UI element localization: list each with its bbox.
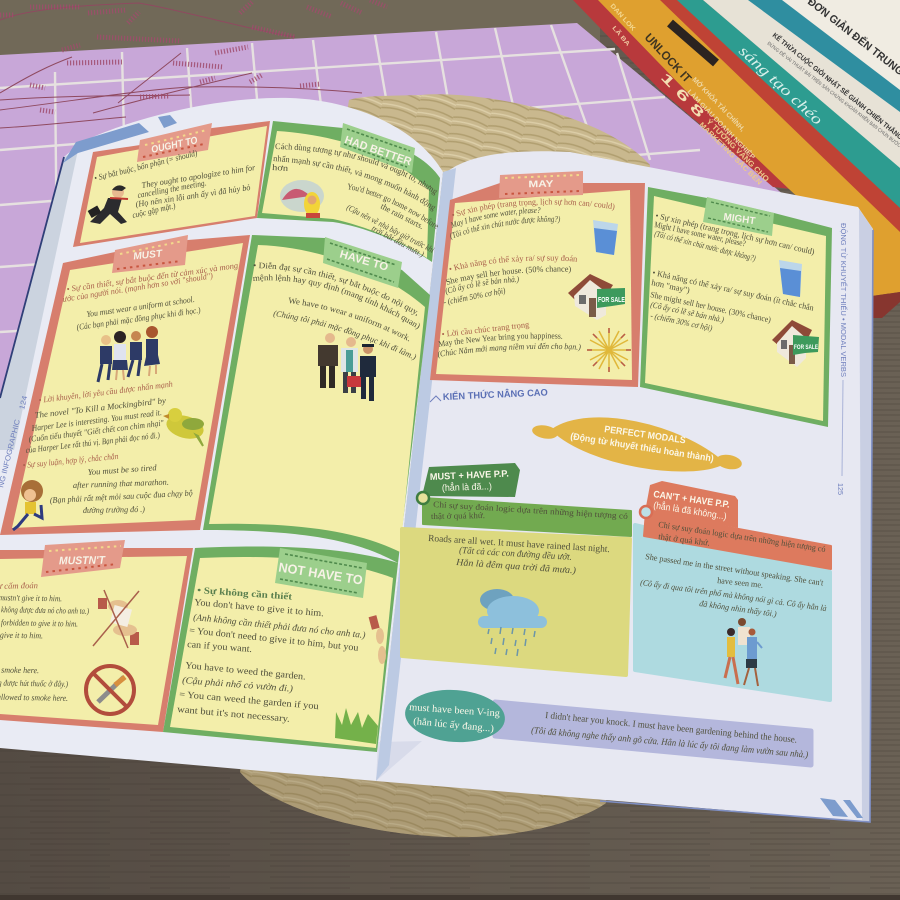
text: must: • Lời khuyên, lời yêu cầu được nhấn mạnh <box>38 379 173 405</box>
text: ought to: cuộc gặp mặt.) <box>131 200 176 220</box>
icon: glass of water <box>779 260 802 297</box>
text: must: • Sự suy luận, hợp lý, chắc chắn <box>22 451 119 470</box>
text: may <box>438 198 614 358</box>
side label: left page running title and page number <box>0 395 29 488</box>
heading: ought to <box>137 123 212 162</box>
example sentence: I didn't hear you knock. I must have been gardening behind the house. <box>545 711 797 746</box>
text: must: Harper Lee is interesting. You must read it. <box>30 407 162 433</box>
tab: must + have p.p.: (hẳn là đã...) <box>442 480 492 494</box>
text: can't + have p.p.: (Cô ấy đi qua tôi trên phố mà không nói gì cả. Cô ấy hẳn là <box>640 577 827 613</box>
heading: mustn't: MUSTN'T <box>59 555 106 567</box>
icon: yellow mockingbird <box>163 408 206 446</box>
text: can't + have p.p.: đã không nhìn thấy tôi.) <box>699 598 778 619</box>
heading: ought to: OUGHT TO <box>150 135 199 156</box>
text: ought to: • Sự bắt buộc, bổn phận (= should) <box>93 148 198 183</box>
ring marker <box>417 492 429 504</box>
heading: had better <box>340 123 415 173</box>
side label: right page chapter title and page number: ĐỘNG TỪ KHUYẾT THIẾU • MODAL VERBS <box>839 223 849 377</box>
text: might <box>650 210 816 333</box>
text: must: ước của người nói. (mạnh hơn so với "should") <box>62 270 214 304</box>
icon: running businessman <box>88 185 128 224</box>
heading: may <box>499 171 583 198</box>
text: not have to: want but it's not necessary. <box>177 705 290 725</box>
text: might: hơn "may") <box>651 277 691 295</box>
book titles: UNLOCK IT <box>642 30 695 86</box>
text: might: Might I have some water, please? <box>654 219 747 248</box>
text: may: • Lời cầu chúc trang trọng <box>441 319 530 339</box>
tab: can't + have p.p.: (hẳn là đã không...) <box>653 499 727 523</box>
icon: house for sale <box>568 274 625 320</box>
text: had better: You'd better go home now before <box>348 184 438 229</box>
text: must: (Cuốn tiểu thuyết "Giết chết con chim nhại" <box>28 417 165 444</box>
icon: house for sale: FOR SALE <box>598 297 625 304</box>
icon: firefighter, doctor and police officer <box>318 333 376 401</box>
icon: house for sale: FOR SALE <box>794 344 818 351</box>
text: can't + have p.p.: thật ở quá khứ. <box>658 531 711 548</box>
text: ought to: (Họ nên xin lỗi anh ấy vì đã hủy bỏ <box>135 182 251 209</box>
text: might: • Khả năng có thể xảy ra/ sự suy đoán (ít chắc chắn <box>652 267 816 313</box>
text: may: May the New Year bring you happiness. <box>438 332 562 348</box>
text: must: You must wear a uniform at school. <box>86 294 195 319</box>
text: must <box>22 260 239 515</box>
text: may: (Tôi có thể xin chút nước được không?) <box>450 216 560 240</box>
text: might: She might sell her house. (30% chance) <box>650 289 772 325</box>
heading: had better: HAD BETTER <box>343 134 413 168</box>
text: had better: (Cậu nên về nhà bây giờ trước khi <box>345 202 437 255</box>
text: must + have p.p. <box>428 499 628 576</box>
side label: right page chapter title and page number: 125 <box>836 483 845 495</box>
text: must + have p.p.: Chỉ sự suy đoán logic dựa trên những hiện tượng có <box>433 499 628 521</box>
heading: have to: HAVE TO <box>338 248 390 274</box>
text: had better <box>272 143 438 259</box>
icon: no smoking sign <box>86 666 134 714</box>
panel: must <box>0 235 250 535</box>
text: might: (Cô ấy có lẽ sẽ bán nhà.) <box>650 299 725 325</box>
heading: might <box>703 197 774 236</box>
heading: must <box>112 235 188 273</box>
text: had better: nhấn mạnh sự cần thiết, và mong muốn hành động <box>273 155 436 212</box>
text: must: (Các bạn phải mặc đồng phục khi đi học.) <box>76 305 201 332</box>
text: not have to: You have to weed the garden. <box>185 661 306 683</box>
book titles: MARKETING SẮC BÉN <box>698 120 764 187</box>
icon: girl with umbrella in the rain <box>280 180 324 218</box>
text: must: (Bạn phải rất mệt mỏi sau cuộc đua chạy bộ <box>50 488 193 505</box>
text: not have to: = You don't need to give it to him, but you <box>189 626 359 654</box>
panel: mustn't <box>0 540 193 732</box>
book titles: sáng tạo chéo <box>735 43 826 129</box>
text: must: đường trường đó .) <box>83 504 145 515</box>
panel: ought to <box>73 121 270 247</box>
heading: might: MIGHT <box>723 212 756 227</box>
heading: have to <box>323 237 402 288</box>
badge: must have been v-ing: (hẳn lúc ấy đang...) <box>413 716 494 735</box>
book titles <box>609 0 900 187</box>
text: not have to: (Anh không cần thiết phải đưa nó cho anh ta.) <box>193 612 366 641</box>
text: not have to: • Sự không cần thiết <box>197 585 293 603</box>
text: can't + have p.p.: have seen me. <box>717 575 764 590</box>
text: had better: hơn <box>272 162 289 173</box>
icon: hands passing a note <box>369 615 386 664</box>
gutter shadow <box>376 168 456 781</box>
text: not have to: (Cậu phải nhổ cỏ vườn đi.) <box>182 675 293 695</box>
side label: left page running title and page number: 124 <box>17 395 29 410</box>
book titles: MỞ KHÓA TÀI CHÍNH, <box>691 75 747 133</box>
icon: grass <box>335 708 378 744</box>
text: have to <box>253 262 420 360</box>
banner: perfect modals: (Động từ khuyết thiếu hoàn thành) <box>570 431 714 465</box>
text: not have to <box>177 585 366 725</box>
text: ought to: They ought to apologize to him for <box>141 162 257 190</box>
text: had better: Cách dùng tương tự như should và ought to, nhưng <box>275 143 438 196</box>
right page <box>376 151 873 822</box>
badge: must have been v-ing: must have been V-ing <box>409 702 500 719</box>
text: can't + have p.p.: Chỉ sự suy đoán logic dựa trên những hiện tượng có <box>658 519 826 554</box>
left page <box>0 98 443 781</box>
book stack <box>573 0 900 318</box>
text: have to: • Diễn đạt sự cần thiết, sự bắt buộc do nội quy, <box>254 262 418 316</box>
example sentence <box>531 711 809 761</box>
text: may: • Sự xin phép (trang trọng, lịch sự hơn can/ could) <box>452 198 614 216</box>
callout: must have been v-ing <box>403 687 811 765</box>
cover and page block edges <box>0 115 873 822</box>
icon: fireworks <box>587 328 631 372</box>
icon: three friends walking <box>725 618 762 686</box>
text: must: You must be so tired <box>87 462 158 477</box>
heading: may: MAY <box>528 179 554 190</box>
icon: students in uniform <box>98 326 160 382</box>
icon: house for sale <box>772 320 819 367</box>
side label: right page chapter title and page number <box>836 223 849 495</box>
banner: perfect modals: PERFECT MODALS <box>604 424 686 446</box>
panel: have to <box>203 235 430 563</box>
text: ought to <box>93 148 257 220</box>
icon: rain cloud <box>478 589 547 656</box>
dried flower branches <box>0 0 387 128</box>
tab: can't + have p.p. <box>645 481 738 528</box>
text: may: (Chúc Năm mới mang niềm vui đến cho bạn.) <box>438 342 581 358</box>
heading: mustn't <box>41 540 125 577</box>
book titles: DAN LOK <box>609 3 637 33</box>
label bar <box>423 498 631 536</box>
text: may: - (chiếm 50% cơ hội) <box>442 285 506 307</box>
text: have to: mệnh lệnh hay quy định (mang tính khách quan) <box>253 274 420 330</box>
text: must + have p.p.: (Tất cả các con đường đều ướt. <box>459 545 572 563</box>
text: may: • Khả năng có thể xảy ra/ sự suy đoán <box>449 255 577 270</box>
heading: must: MUST <box>133 248 164 262</box>
text: must: • Sự cần thiết, sự bắt buộc đến từ cảm xúc và mong <box>66 260 239 294</box>
text: mustn't <box>0 580 89 703</box>
text: not have to: can if you want. <box>187 639 252 655</box>
tab: can't + have p.p.: CAN'T + HAVE P.P. <box>653 489 730 511</box>
text: can't + have p.p. <box>640 519 827 619</box>
panel: not have to <box>163 547 398 752</box>
text: might: - (chiếm 30% cơ hội) <box>650 310 713 333</box>
wicker basket <box>240 94 650 837</box>
text: have to: (Chúng tôi phải mặc đồng phục khi đi làm.) <box>273 310 416 360</box>
text: may: (Cô ấy có lẽ sẽ bán nhà.) <box>446 276 519 296</box>
book titles: Ý TƯỞNG VÀNG CHO <box>705 117 771 184</box>
banner: perfect modals <box>531 419 743 471</box>
text: must + have p.p.: thật ở quá khứ. <box>431 510 485 521</box>
tab: must + have p.p.: MUST + HAVE P.P. <box>430 469 509 483</box>
text: may: May I have some water, please? <box>450 207 540 228</box>
book titles: 1 6 8 <box>658 70 708 120</box>
panel: might <box>640 187 832 427</box>
text: might: (Tôi có thể xin chút nước được không?) <box>654 228 757 263</box>
text: must: The novel "To Kill a Mockingbird" by <box>34 395 167 420</box>
label bar <box>644 512 831 569</box>
text: can't + have p.p.: She passed me in the street without speaking. She can't <box>645 551 825 588</box>
text: may: She may sell her house. (50% chance) <box>446 266 571 285</box>
icon: crossed hands passing a note <box>93 590 139 648</box>
corner stripes <box>820 798 863 818</box>
badge: must have been v-ing <box>403 687 507 745</box>
text: must + have p.p.: Roads are all wet. It must have rained last night. <box>428 534 610 555</box>
text: have to: We have to wear a uniform at work. <box>288 298 410 342</box>
text: not have to: = You can weed the garden if you <box>179 689 319 712</box>
heading: not have to <box>275 548 367 598</box>
panel: must + have p.p. <box>402 463 631 675</box>
text: not have to: You don't have to give it to him. <box>194 598 324 619</box>
book titles: LÀM GIÀU DOANH NGHIỆP <box>686 87 758 162</box>
tab: must + have p.p. <box>422 463 520 497</box>
heading: not have to: NOT HAVE TO <box>278 559 364 588</box>
section heading: advanced knowledge: KIẾN THỨC NÂNG CAO <box>443 386 548 403</box>
text: ought to: cancelling the meeting. <box>137 177 207 200</box>
text: had better: the rain starts. <box>379 201 426 231</box>
panel: had better <box>257 121 440 262</box>
panel: can't + have p.p. <box>635 481 831 700</box>
icon: glass of water <box>593 220 618 255</box>
book titles: LÃ BA <box>610 25 632 48</box>
text: must + have p.p.: Hẳn là đêm qua trời đã mưa.) <box>455 557 576 576</box>
ring marker <box>640 506 652 518</box>
text: had better: trời bắt đầu mưa.) <box>370 223 426 259</box>
text: must: after running that marathon. <box>73 477 169 490</box>
text: must: của Harper Lee rất thú vị. Bạn phải đọc nó đi.) <box>25 430 160 455</box>
icon: running boy <box>13 480 43 530</box>
panel: may <box>430 171 645 387</box>
purple grid mat <box>0 23 790 520</box>
example sentence: (Tôi đã không nghe thấy anh gõ cửa. Hẳn là lúc ấy tôi đang làm vườn sau nhà.) <box>531 725 809 761</box>
text: might: • Sự xin phép (trang trọng, lịch sự hơn can/ could) <box>655 210 816 257</box>
